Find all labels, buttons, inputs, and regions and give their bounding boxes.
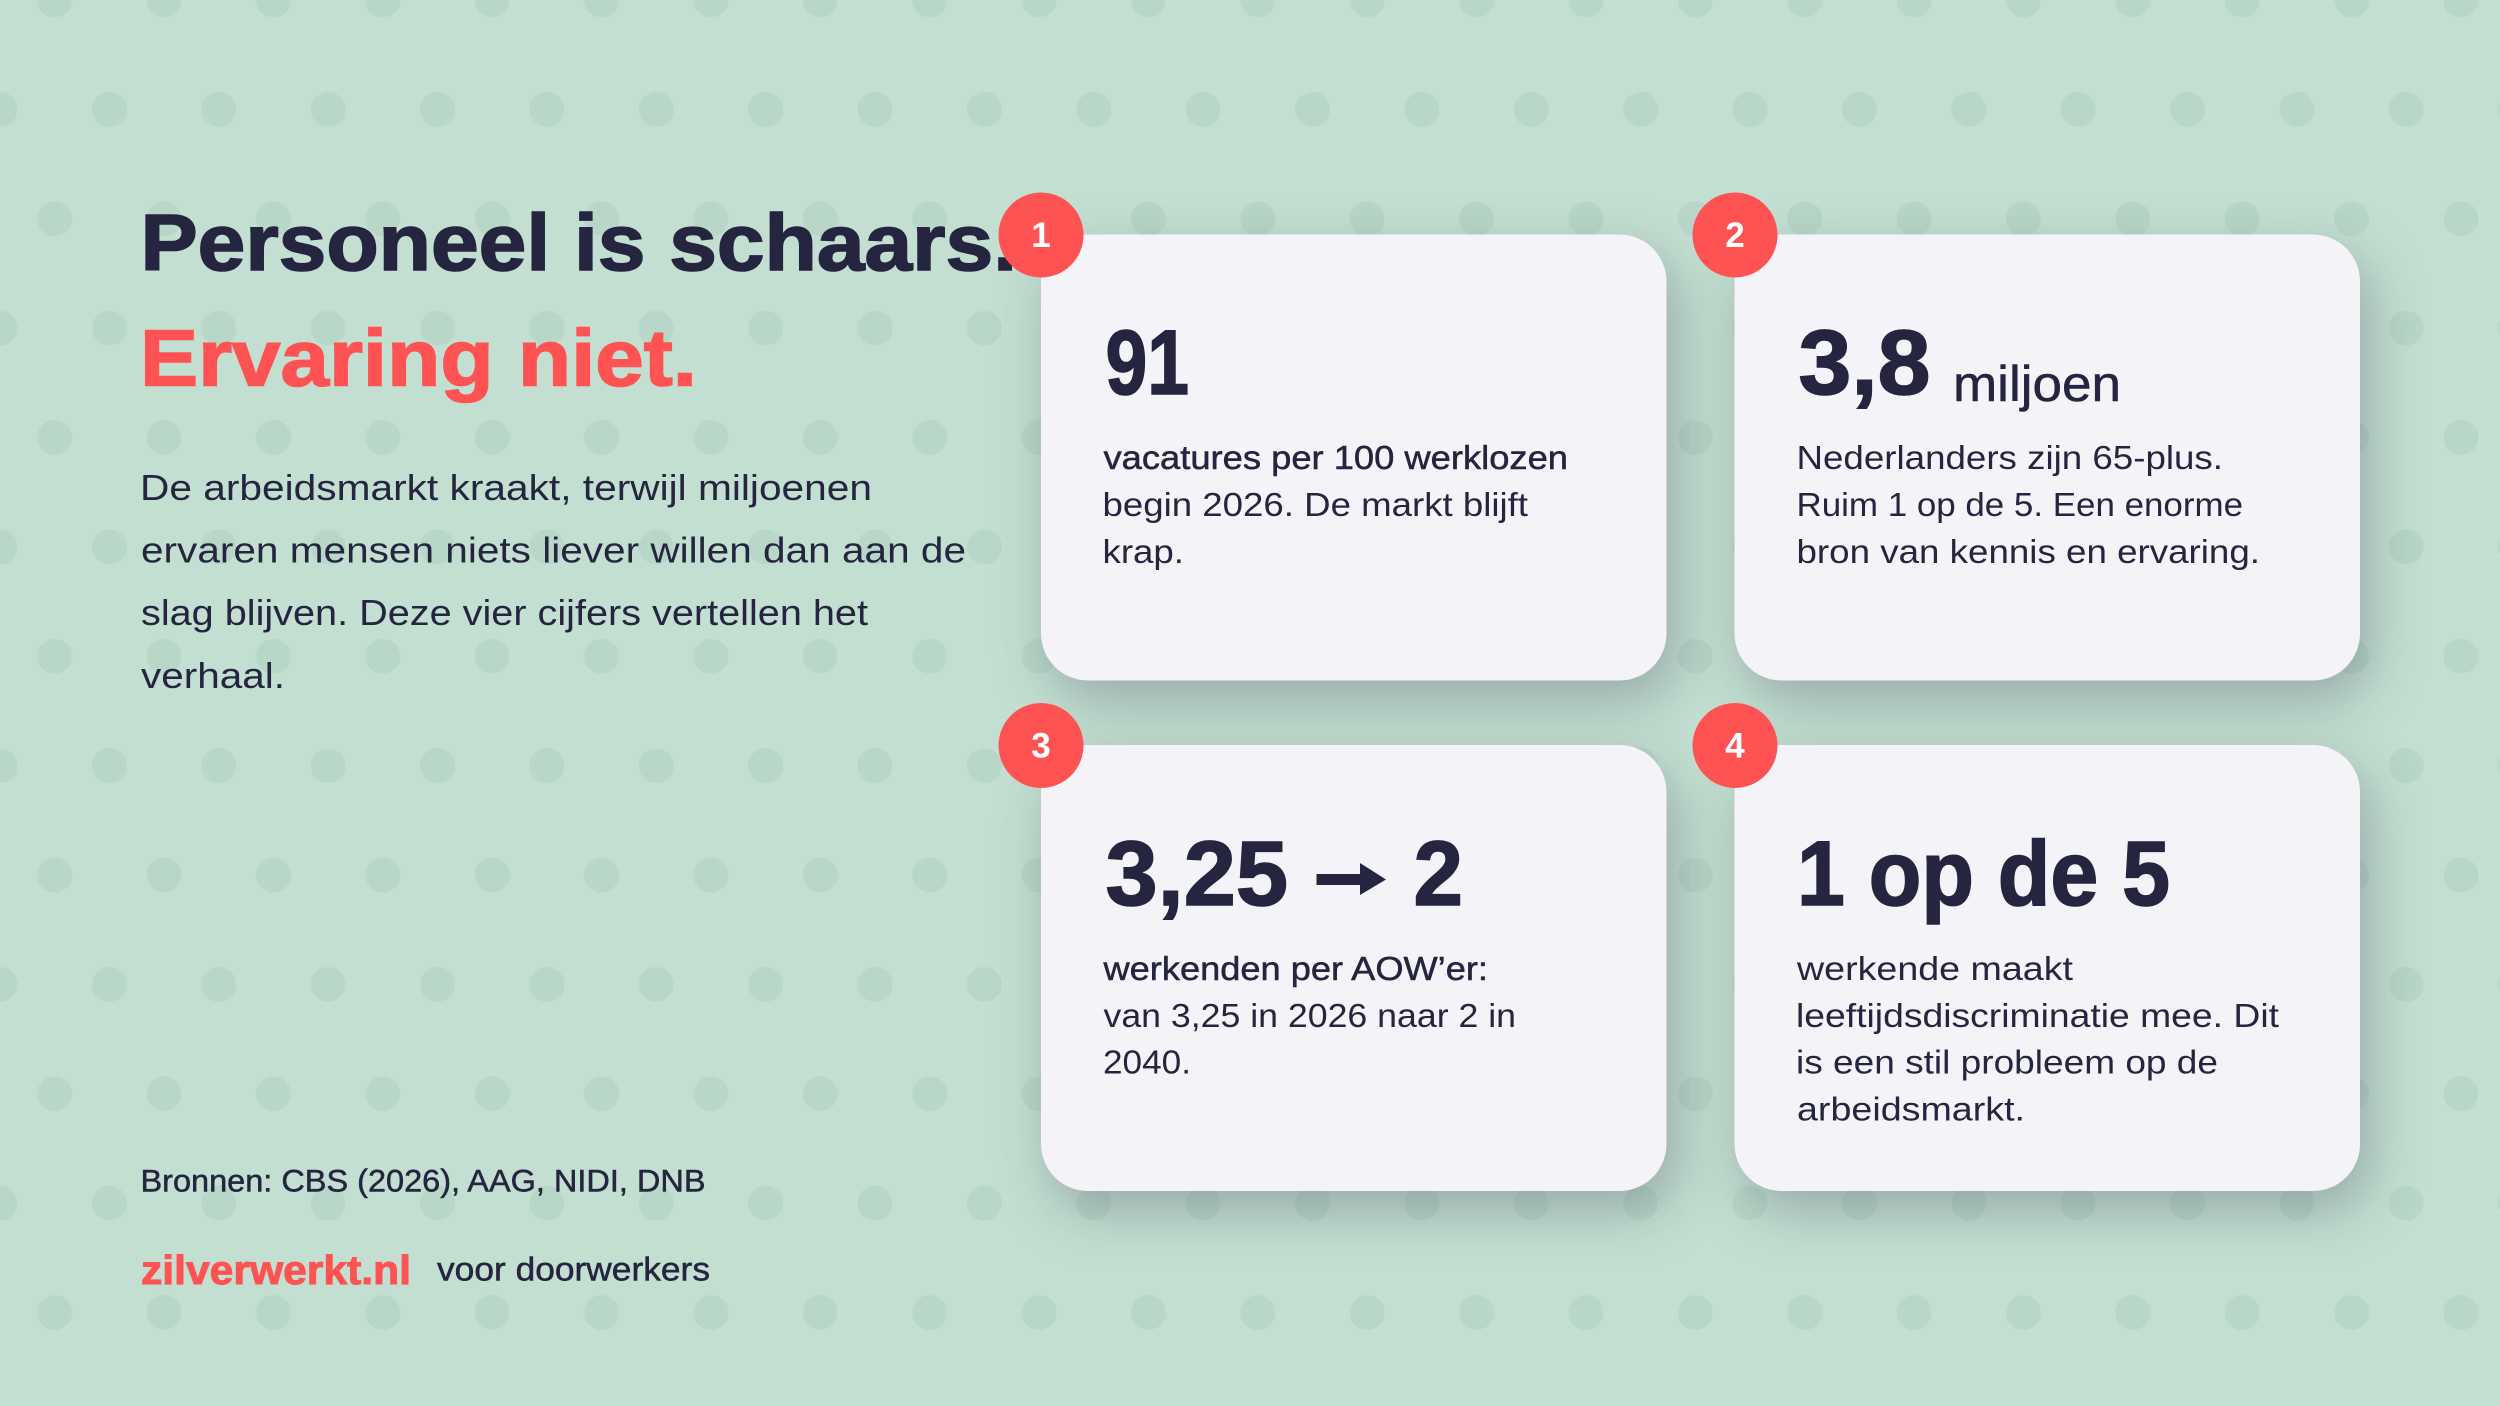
description: Ruim 1 op de 5. Een enorme	[1796, 487, 2243, 524]
description: werkenden per AOW’er:	[1102, 951, 1488, 988]
big number with arrow: 2	[1414, 823, 1463, 925]
big number: 3,8	[1798, 312, 1930, 414]
description: van 3,25 in 2026 naar 2 in	[1104, 998, 1516, 1035]
heading line 1: Personeel is schaars.	[140, 198, 1017, 287]
number badge 1: 1	[1031, 216, 1051, 255]
number badge 3	[998, 703, 1084, 788]
description	[1796, 440, 2260, 571]
tagline: voor doorwerkers	[437, 1252, 710, 1288]
description: krap.	[1102, 534, 1184, 571]
number badge 1	[998, 192, 1084, 278]
big number: 1 op de 5	[1797, 823, 2170, 925]
card background	[1734, 745, 2360, 1191]
number badge 4: 4	[1725, 726, 1745, 766]
card background	[1041, 234, 1666, 680]
brand name: zilverwerkt.nl	[141, 1247, 411, 1293]
description: begin 2026. De markt blijft	[1102, 487, 1529, 524]
big number: 91	[1106, 312, 1189, 414]
description: leeftijdsdiscriminatie mee. Dit	[1796, 998, 2280, 1035]
big number with arrow	[1106, 823, 1463, 925]
panel: stat card 2	[1692, 192, 2360, 680]
card background	[1041, 745, 1666, 1191]
description	[1102, 951, 1516, 1082]
number badge 2	[1692, 192, 1778, 278]
description	[1102, 440, 1568, 571]
intro text block	[140, 467, 966, 696]
description: Nederlanders zijn 65-plus.	[1796, 440, 2223, 477]
number badge 2: 2	[1725, 216, 1745, 255]
big number with arrow: 3,25	[1106, 823, 1288, 925]
number badge 4	[1692, 703, 1778, 788]
description: is een stil probleem op de	[1796, 1044, 2218, 1082]
description: bron van kennis en ervaring.	[1796, 534, 2260, 571]
description: arbeidsmarkt.	[1797, 1092, 2025, 1128]
heading line 2: Ervaring niet.	[140, 314, 697, 402]
panel: stat card 4	[1692, 703, 2360, 1191]
description	[1796, 951, 2280, 1128]
description: 2040.	[1103, 1044, 1191, 1082]
intro text block: verhaal.	[141, 655, 285, 696]
title	[140, 198, 1017, 402]
description: werkende maakt	[1796, 951, 2074, 988]
panel: stat card 3	[998, 703, 1666, 1191]
sources: Bronnen: CBS (2026), AAG, NIDI, DNB	[140, 1162, 706, 1198]
description: vacatures per 100 werklozen	[1104, 440, 1568, 477]
brand footer	[141, 1247, 710, 1293]
card background	[1734, 234, 2360, 680]
intro text block: ervaren mensen niets liever willen dan aan de	[141, 530, 966, 570]
icon: arrow	[1316, 863, 1386, 895]
intro text block: slag blijven. Deze vier cijfers vertellen het	[141, 592, 868, 633]
panel: stat card 1	[998, 192, 1666, 680]
intro text block: De arbeidsmarkt kraakt, terwijl miljoenen	[140, 467, 872, 508]
number badge 3: 3	[1031, 726, 1051, 766]
unit label: miljoen	[1953, 356, 2121, 412]
